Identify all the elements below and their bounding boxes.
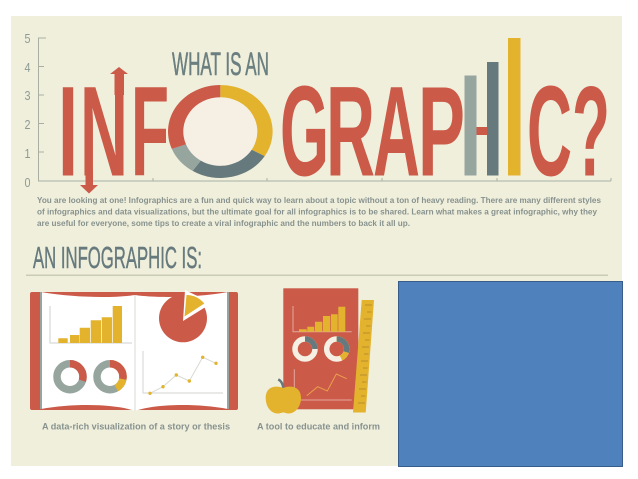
letter N with arrows: N	[80, 60, 128, 204]
notebook line chart	[294, 369, 352, 400]
chart axes with scale: 4	[24, 60, 30, 75]
letter R: R	[326, 60, 375, 204]
red notebook	[283, 288, 358, 409]
intro paragraph: of infographics and data visualizations, but the ultimate goal for all infographics is to be shared. Learn what makes a great infographic, why they	[37, 208, 598, 216]
letter A: A	[373, 60, 420, 204]
donut chart: right	[97, 364, 123, 390]
chart axes with scale: 2	[24, 117, 30, 132]
book cover	[30, 292, 238, 410]
title word: infographic: G	[280, 60, 329, 204]
notebook donut: left	[295, 339, 315, 359]
letter O drawn as donut chart	[168, 85, 273, 178]
title word: infographic: F	[131, 60, 169, 204]
bar chart	[50, 306, 132, 343]
illustration: open book	[30, 290, 238, 411]
letter I drawn as tall bar	[508, 38, 520, 176]
blue rectangle overlay	[398, 282, 622, 466]
donut chart: left	[57, 364, 83, 390]
intro paragraph	[37, 196, 602, 228]
letter N with arrows	[80, 60, 128, 204]
chart axes with scale: 1	[24, 146, 30, 161]
apple	[266, 379, 301, 414]
heading rule	[26, 274, 608, 276]
line chart	[143, 351, 223, 395]
letter P: P	[418, 60, 465, 204]
section heading: AN INFOGRAPHIC IS:	[33, 241, 202, 275]
illustration: school tools	[266, 288, 374, 414]
chart axes with scale: 5	[24, 31, 30, 46]
caption: book: A data-rich visualization of a story or thesis	[42, 422, 230, 432]
subtitle: what is an: WHAT IS AN	[172, 46, 269, 82]
book pages	[41, 292, 228, 411]
chart axes with scale: 3	[24, 88, 30, 103]
letter H drawn as bars	[464, 62, 498, 176]
letter I: I	[58, 60, 78, 204]
pie chart	[159, 290, 212, 342]
notebook donut: right	[327, 339, 347, 359]
intro paragraph: are useful for everyone, some tips to create a viral infographic and the numbers to back it all up.	[37, 219, 410, 228]
notebook bar chart	[293, 306, 352, 332]
intro paragraph: You are looking at one! Infographics are a fun and quick way to learn about a topic without a ton of heavy reading. There are many different styles	[37, 196, 602, 205]
title word: infographic	[58, 38, 610, 204]
ruler	[353, 300, 374, 412]
caption: tool: A tool to educate and inform	[257, 422, 380, 432]
chart axes with scale	[24, 31, 611, 190]
chart axes with scale: 0	[24, 175, 30, 190]
title word: infographic: C	[527, 60, 572, 204]
